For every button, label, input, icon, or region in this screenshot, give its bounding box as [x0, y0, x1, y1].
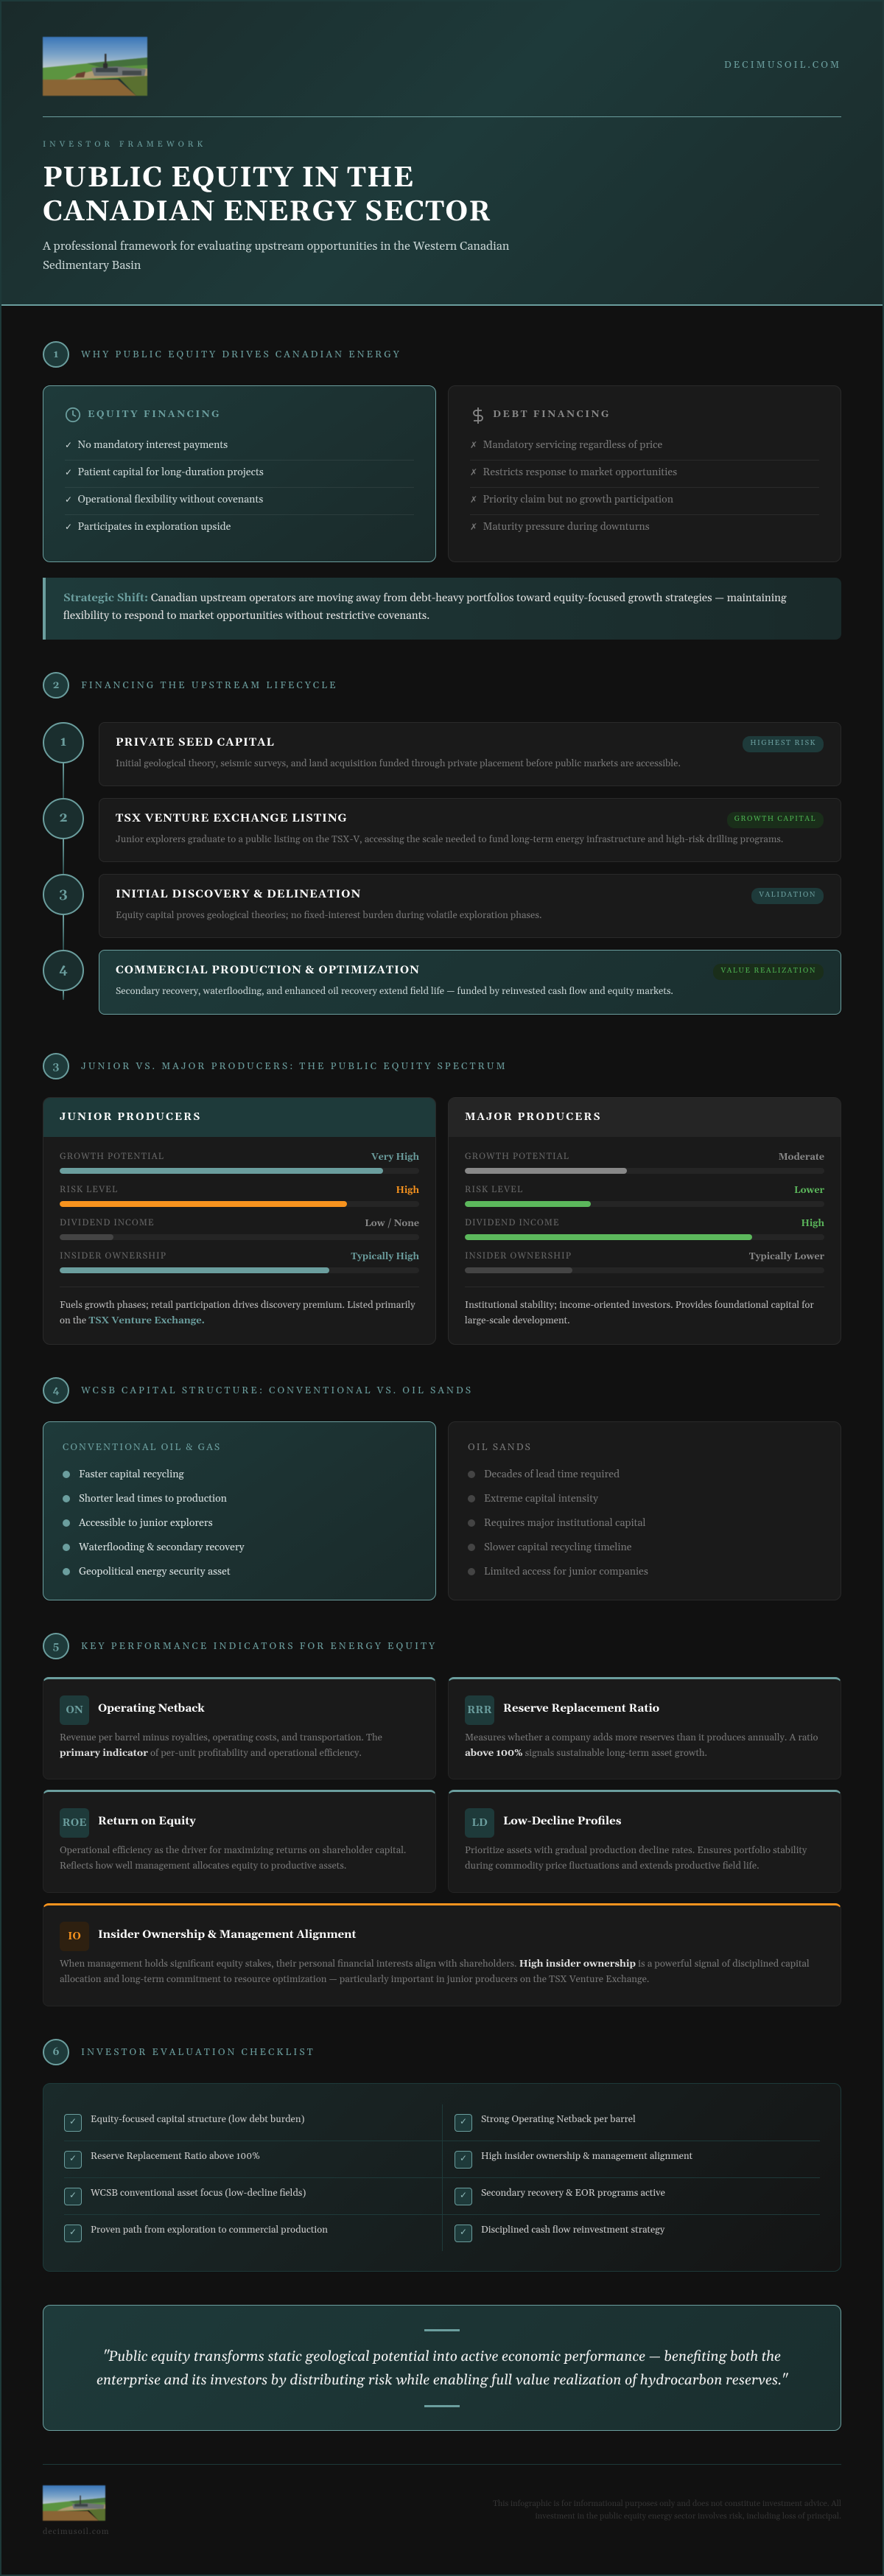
insider ownership meter [465, 1251, 824, 1273]
summary note: Fuels growth phases; retail participation drives discovery premium. Listed primarily on the TSX Venture Exchange. [60, 1300, 415, 1327]
header banner [1, 1, 883, 306]
bullet list [63, 1468, 245, 1578]
KPI card: return on equity: Operational efficiency as the driver for maximizing returns on shareholder capital. Reflects how well management allocates equity to productive assets. [60, 1845, 406, 1872]
KPI card: reserve replacement ratio: Measures whether a company adds more reserves than it produces annually. A ratio above 100% signals sustainable long-term asset growth. [465, 1732, 818, 1760]
step 4 card: Secondary recovery, waterflooding, and enhanced oil recovery extend field life — funded by reinvested cash flow and equity markets. [116, 986, 673, 998]
quote text [97, 2348, 788, 2390]
drawback list: Restricts response to market opportunities [483, 466, 677, 479]
step 2 card [99, 798, 841, 862]
checklist item: Reserve Replacement Ratio above 100% [91, 2151, 260, 2163]
step 4 marker [43, 950, 84, 991]
checklist item: Proven path from exploration to commercial production [91, 2225, 328, 2236]
title [43, 161, 492, 230]
section heading 5: KEY PERFORMANCE INDICATORS FOR ENERGY EQUITY [81, 1641, 437, 1653]
panel: equity financing [43, 385, 436, 562]
section heading 6: INVESTOR EVALUATION CHECKLIST [81, 2047, 315, 2059]
risk level meter: RISK LEVEL [465, 1185, 523, 1196]
section heading 6 [43, 2039, 315, 2065]
section heading 2: FINANCING THE UPSTREAM LIFECYCLE [81, 680, 338, 692]
quote panel [43, 2305, 841, 2431]
checklist item [64, 2188, 306, 2205]
checklist item: Equity-focused capital structure (low debt burden) [91, 2114, 304, 2126]
risk level meter [465, 1185, 824, 1207]
panel: debt financing [448, 385, 841, 562]
heading: CONVENTIONAL OIL & GAS [63, 1442, 221, 1454]
checklist item [455, 2188, 665, 2205]
bullet list: Shorter lead times to production [79, 1492, 227, 1505]
KPI card: operating netback [43, 1677, 436, 1779]
KPI card: return on equity [43, 1790, 436, 1893]
quote text: "Public equity transforms static geological potential into active economic performance — benefiting both the [103, 2348, 781, 2366]
step 3 card [99, 874, 841, 938]
checklist item [455, 2151, 692, 2169]
insider ownership meter: Typically High [351, 1251, 419, 1263]
footer divider [43, 2464, 841, 2465]
growth potential meter [465, 1152, 824, 1174]
heading: EQUITY FINANCING [88, 409, 221, 421]
drawback list: ✗ [470, 468, 477, 479]
risk level meter: RISK LEVEL [60, 1185, 118, 1196]
bullet list: Limited access for junior companies [484, 1565, 648, 1578]
logo: drilling rig photo [42, 36, 148, 96]
KPI card: low-decline profiles [448, 1790, 841, 1893]
panel header: MAJOR PRODUCERS [465, 1110, 602, 1124]
growth potential meter: GROWTH POTENTIAL [465, 1152, 569, 1163]
dividend income meter: Low / None [365, 1218, 419, 1230]
step 3 card: VALIDATION [759, 891, 816, 900]
checklist item: Secondary recovery & EOR programs active [481, 2188, 665, 2199]
footer disclaimer: investment in the public equity energy sector involves risk, including loss of principal. [535, 2511, 841, 2521]
dividend income meter: High [801, 1218, 824, 1230]
drawback list: Maturity pressure during downturns [483, 520, 650, 533]
step 2 marker [43, 798, 84, 839]
checklist item: ✓ [460, 2117, 467, 2128]
website label: DECIMUSOIL.COM [724, 60, 841, 71]
bullet list: Slower capital recycling timeline [484, 1541, 632, 1554]
step 1 marker: 1 [60, 734, 66, 751]
section heading 1: WHY PUBLIC EQUITY DRIVES CANADIAN ENERGY [81, 349, 401, 361]
section heading 3: JUNIOR VS. MAJOR PRODUCERS: THE PUBLIC EQUITY SPECTRUM [81, 1061, 508, 1073]
step 2 card: Junior explorers graduate to a public listing on the TSX-V, accessing the scale needed to fund long-term energy infrastructure and high-risk drilling programs. [116, 834, 783, 846]
drawback list: ✗ [470, 495, 477, 506]
subtitle: A professional framework for evaluating upstream opportunities in the Western Canadian [43, 239, 509, 254]
bullet list: Decades of lead time required [484, 1468, 620, 1481]
step 1 card: Initial geological theory, seismic surveys, and land acquisition funded through private placement before public markets are accessible. [116, 758, 681, 770]
checklist item: ✓ [460, 2154, 467, 2165]
checklist item: ✓ [69, 2117, 77, 2128]
risk level meter: High [396, 1185, 419, 1197]
panel: oil sands [448, 1421, 841, 1600]
step 3 marker: 3 [59, 886, 68, 903]
benefit list: Patient capital for long-duration projects [78, 466, 264, 479]
checklist item: Strong Operating Netback per barrel [481, 2114, 636, 2126]
step 3 marker [43, 874, 84, 915]
bullet list: Geopolitical energy security asset [79, 1565, 231, 1578]
KPI card: return on equity: Return on Equity [98, 1815, 196, 1829]
section heading 1 [43, 341, 401, 368]
dividend income meter: DIVIDEND INCOME [465, 1218, 560, 1229]
panel: junior producers [43, 1097, 436, 1345]
KPI card: low-decline profiles: LD [471, 1816, 488, 1830]
benefit list: Operational flexibility without covenants [78, 493, 263, 506]
benefit list: ✓ [65, 495, 72, 506]
insider ownership meter [60, 1251, 419, 1273]
risk level meter [60, 1185, 419, 1207]
checklist item: ✓ [460, 2227, 467, 2239]
step 4 card: VALUE REALIZATION [720, 967, 816, 976]
step 2 card: TSX VENTURE EXCHANGE LISTING [116, 812, 348, 826]
bullet list: Requires major institutional capital [484, 1516, 645, 1530]
quote text: enterprise and its investors by distributing risk while enabling full value realization of hydrocarbon reserves." [97, 2372, 787, 2390]
panel header [43, 1098, 435, 1137]
footer disclaimer [493, 2499, 841, 2521]
heading: DEBT FINANCING [493, 409, 611, 421]
bullet list: Extreme capital intensity [484, 1492, 598, 1505]
step 4 card [99, 950, 841, 1015]
step 1 marker [43, 722, 84, 763]
checklist item: Disciplined cash flow reinvestment strategy [481, 2225, 664, 2236]
title: PUBLIC EQUITY IN THE [43, 161, 414, 196]
quote rule top [424, 2329, 460, 2331]
summary note: Institutional stability; income-oriented investors. Provides foundational capital for large-scale development. [465, 1300, 814, 1327]
KPI card: low-decline profiles: Prioritize assets with gradual production decline rates. Ensures portfolio stability during commodity price fluctuations and extends productive field life. [465, 1845, 807, 1872]
step 2 card: GROWTH CAPITAL [734, 815, 816, 824]
drawback list: ✗ [470, 441, 477, 452]
benefit list: ✓ [65, 522, 72, 533]
icon: clock [65, 407, 81, 423]
growth potential meter [60, 1152, 419, 1174]
KPI card: operating netback: ON [66, 1704, 83, 1717]
heading: OIL SANDS [468, 1442, 532, 1454]
KPI card: operating netback: Operating Netback [98, 1702, 205, 1716]
title: CANADIAN ENERGY SECTOR [43, 195, 492, 230]
step 4 card: COMMERCIAL PRODUCTION & OPTIMIZATION [116, 964, 420, 978]
bullet list [468, 1468, 648, 1578]
step 1 card [99, 722, 841, 786]
panel header: JUNIOR PRODUCERS [60, 1110, 201, 1124]
growth potential meter: Very High [371, 1152, 419, 1163]
callout: strategic shift [43, 578, 841, 640]
panel header [449, 1098, 841, 1137]
KPI card: insider ownership: When management holds significant equity stakes, their personal financial interests align with shareholders. High insider ownership is a powerful signal of disciplined capital allocation and long-term commitment to resource optimization — particularly important in junior producers on the TSX Venture Exchange. [60, 1959, 810, 1986]
section heading 2 [43, 672, 338, 699]
dividend income meter [465, 1218, 824, 1240]
section heading 5: 5 [53, 1639, 59, 1653]
callout: strategic shift: Strategic Shift: Canadian upstream operators are moving away from debt-heavy portfolios toward equity-focused growth strategies — maintaining flexibility to respond to market opportunities without restrictive covenants. [63, 592, 787, 623]
subtitle [43, 239, 510, 273]
section heading 1: 1 [54, 348, 58, 361]
section heading 6: 6 [52, 2045, 60, 2059]
checklist item: ✓ [69, 2191, 77, 2202]
drawback list: Priority claim but no growth participation [483, 493, 673, 506]
icon: dollar [473, 407, 483, 424]
KPI card: insider ownership: IO [68, 1930, 81, 1943]
step 2 marker: 2 [59, 810, 68, 827]
drawback list: ✗ [470, 522, 477, 533]
timeline: upstream lifecycle [43, 722, 841, 1015]
dividend income meter: DIVIDEND INCOME [60, 1218, 155, 1229]
section heading 3 [43, 1053, 508, 1079]
KPI card: reserve replacement ratio [448, 1677, 841, 1779]
checklist item [64, 2151, 260, 2169]
risk level meter: Lower [794, 1185, 824, 1197]
KPI card: insider ownership [43, 1903, 841, 2006]
checklist item: ✓ [69, 2154, 77, 2165]
benefit list: Participates in exploration upside [78, 520, 231, 533]
section heading 4 [43, 1377, 473, 1404]
header divider [43, 116, 841, 117]
KPI card: low-decline profiles: Low-Decline Profiles [503, 1815, 621, 1829]
section heading 4: WCSB CAPITAL STRUCTURE: CONVENTIONAL VS. OIL SANDS [81, 1385, 473, 1397]
checklist item: ✓ [460, 2191, 467, 2202]
checklist item [455, 2225, 664, 2242]
footer disclaimer: This infographic is for informational purposes only and does not constitute investment advice. All [493, 2499, 841, 2509]
checklist item: High insider ownership & management alignment [481, 2151, 692, 2163]
drawback list [470, 438, 819, 533]
bullet list: Faster capital recycling [79, 1468, 184, 1481]
KPI card: reserve replacement ratio: RRR [467, 1704, 492, 1717]
benefit list [65, 438, 414, 533]
checklist item [455, 2114, 636, 2132]
KPI card: insider ownership: Insider Ownership & Management Alignment [98, 1928, 357, 1942]
eyebrow: INVESTOR FRAMEWORK [43, 139, 206, 150]
KPI card: reserve replacement ratio: Reserve Replacement Ratio [503, 1702, 659, 1716]
panel: investor checklist [43, 2083, 841, 2272]
growth potential meter: GROWTH POTENTIAL [60, 1152, 164, 1163]
insider ownership meter: INSIDER OWNERSHIP [465, 1251, 572, 1262]
step 3 card: INITIAL DISCOVERY & DELINEATION [116, 888, 361, 902]
insider ownership meter: INSIDER OWNERSHIP [60, 1251, 166, 1262]
footer domain: decimusoil.com [43, 2527, 110, 2537]
section heading 5 [43, 1633, 437, 1659]
KPI card: return on equity: ROE [63, 1816, 86, 1830]
bullet list: Waterflooding & secondary recovery [79, 1541, 245, 1554]
footer logo [42, 2485, 106, 2521]
section heading 4: 4 [52, 1384, 60, 1397]
section heading 3: 3 [53, 1060, 59, 1073]
panel: major producers [448, 1097, 841, 1345]
checklist item: WCSB conventional asset focus (low-decline fields) [91, 2188, 306, 2199]
step 1 card: PRIVATE SEED CAPITAL [116, 736, 275, 750]
bullet list: Accessible to junior explorers [79, 1516, 213, 1530]
checklist item [64, 2225, 328, 2242]
benefit list: No mandatory interest payments [78, 438, 228, 452]
KPI card: operating netback: Revenue per barrel minus royalties, operating costs, and transportation. The primary indicator of per-unit profitability and operational efficiency. [60, 1732, 382, 1760]
benefit list: ✓ [65, 441, 72, 452]
step 4 marker: 4 [59, 962, 68, 979]
quote rule bottom [424, 2405, 460, 2407]
step 3 card: Equity capital proves geological theories; no fixed-interest burden during volatile exploration phases. [116, 910, 541, 922]
benefit list: ✓ [65, 468, 72, 479]
panel: conventional oil and gas [43, 1421, 436, 1600]
drawback list: Mandatory servicing regardless of price [483, 438, 662, 452]
checklist item [64, 2114, 304, 2132]
insider ownership meter: Typically Lower [749, 1251, 824, 1263]
checklist item: ✓ [69, 2227, 77, 2239]
step 1 card: HIGHEST RISK [750, 739, 816, 748]
growth potential meter: Moderate [779, 1152, 824, 1163]
dividend income meter [60, 1218, 419, 1240]
subtitle: Sedimentary Basin [43, 259, 141, 273]
section heading 2: 2 [53, 679, 59, 692]
